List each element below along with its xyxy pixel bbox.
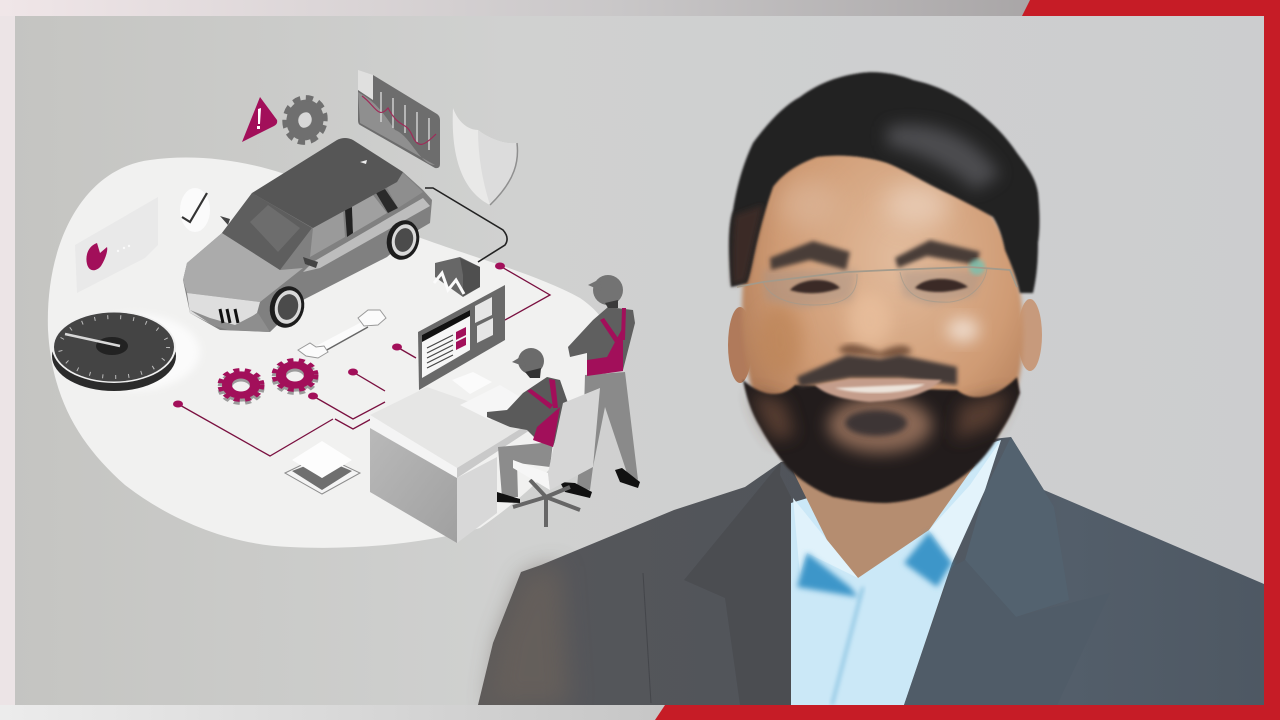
nose [838,344,912,358]
car body [183,172,432,332]
left lapel [684,462,791,705]
chair [513,388,600,527]
glasses [737,267,1017,305]
icon: check card [180,188,210,232]
skin shading [758,305,802,375]
jacket fold line [643,573,651,703]
right lapel upper [965,437,1069,617]
glasses lens haze [763,270,985,308]
shirt placket [832,587,863,705]
icon: gear [280,94,330,146]
right lapel lower [904,560,1110,705]
monitor [418,285,505,390]
chip [285,441,360,494]
ears [728,307,752,383]
grille bars [220,309,238,323]
mouth [815,379,942,402]
beard cheek tint [752,392,1010,440]
side stripe [303,198,430,272]
circuit lines [173,262,550,456]
hood [183,233,303,302]
frame: top strip [0,0,1030,16]
beard [743,377,1020,503]
teeth [835,384,925,393]
frame: top red band [1022,0,1280,16]
icon: chart panel [358,70,440,168]
bumper [187,293,260,328]
blob backdrop [48,157,612,548]
speedometer [52,311,200,391]
frame: right red band [1264,0,1280,720]
shirt [791,440,1001,705]
charger plug [434,257,480,297]
illustration: vehicle diagnostics [48,70,640,548]
neck [790,465,975,578]
worker standing [560,275,640,498]
collar [793,498,858,578]
wrench [298,310,386,358]
worker seated [487,348,568,503]
windows [310,210,345,257]
icon: shield [453,108,518,205]
moustache [797,355,957,387]
car [183,138,432,332]
portrait: man in suit [478,72,1264,705]
icon: pie card [75,197,158,293]
glasses reflection [969,259,985,275]
roof [252,138,403,228]
icon: warning triangle [242,97,277,142]
mirrors [220,216,318,268]
hair sideburn tint [732,205,763,285]
hair [729,72,1040,293]
eyebrows [770,240,980,270]
collar shadows [797,532,952,597]
face [742,135,1023,485]
frame: bottom red band [655,705,1280,720]
hair highlight [887,125,1000,190]
frame: bottom strip [0,705,665,720]
magenta gears [220,360,316,403]
chin patch [845,410,907,436]
beard chin tint [828,397,932,453]
jacket [478,437,1264,705]
jacket sleeve shadow [490,565,570,705]
windshield [222,193,312,270]
eyes [790,279,968,293]
charging cable [425,188,507,262]
desk [370,372,530,543]
wheels [265,217,424,332]
frame: left strip [0,0,15,720]
